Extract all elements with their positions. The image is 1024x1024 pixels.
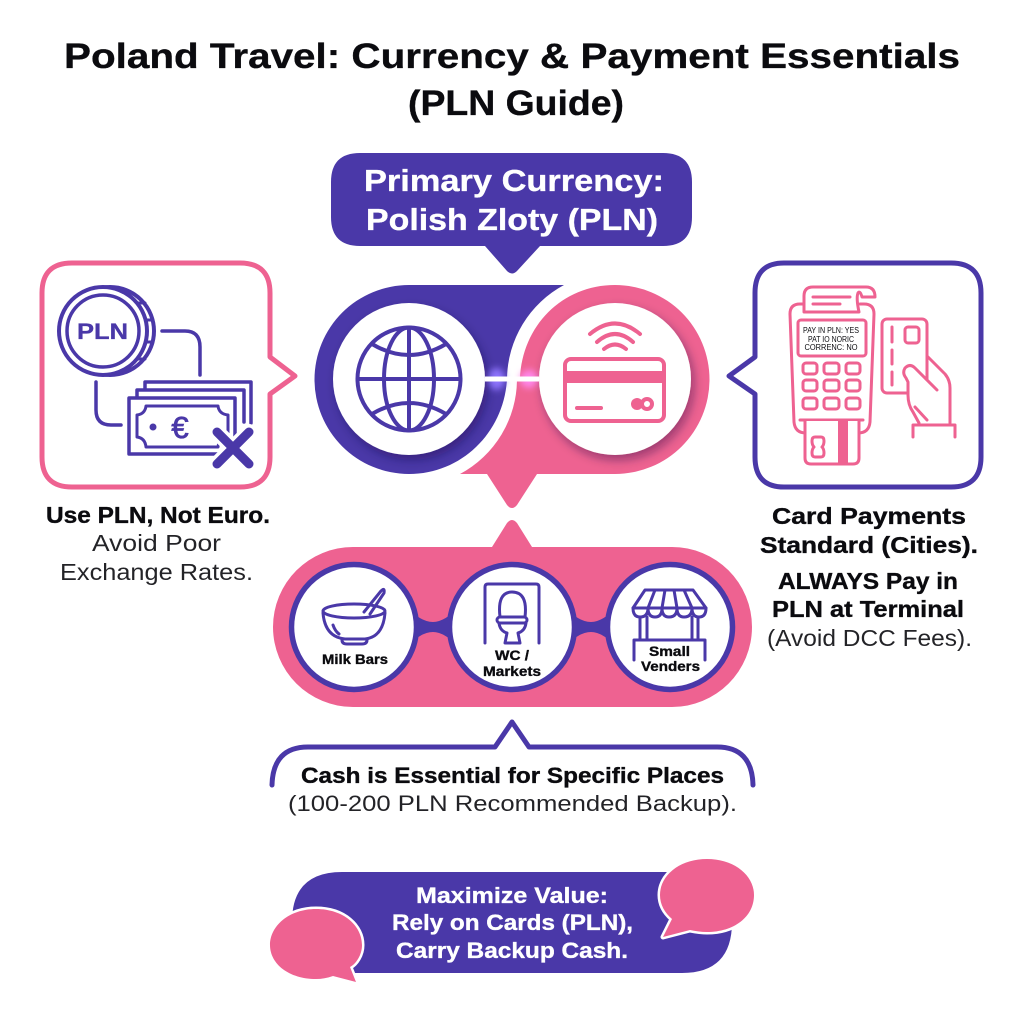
icon: euro banknotes crossed out <box>129 382 251 464</box>
circle: WC / markets <box>450 564 574 690</box>
callout: primary currency <box>331 153 692 274</box>
icon: contactless card <box>565 324 664 421</box>
icon: bowl and spoon <box>323 589 385 644</box>
icon: payment terminal <box>790 287 875 464</box>
purple pill <box>292 872 732 973</box>
banner text: Maximize Value: <box>416 883 608 908</box>
icon: PLN coin: PLN <box>77 319 128 344</box>
icon: speech bubble left <box>270 909 362 982</box>
text: cash note: Cash is Essential for Specific Places <box>301 763 724 788</box>
text: card payments: Card Payments <box>772 503 966 529</box>
title <box>64 37 960 123</box>
panel outline: purple speech box <box>729 263 981 487</box>
arrows: exchange connectors <box>96 331 200 425</box>
purple half with globe <box>314 285 564 474</box>
text: use PLN: Avoid Poor <box>92 530 221 556</box>
circle: small vendors <box>608 564 732 690</box>
icon: toilet <box>485 584 539 643</box>
text: card payments: PLN at Terminal <box>772 596 964 622</box>
circle: milk bars <box>292 564 416 690</box>
panel: use PLN not euro <box>42 263 295 487</box>
circle: small vendors: Venders <box>641 659 700 674</box>
bracket: cash note <box>272 722 753 785</box>
circle: WC / markets: WC / <box>495 647 529 663</box>
circle: milk bars: Milk Bars <box>322 652 388 667</box>
title: Poland Travel: Currency & Payment Essentials <box>64 37 960 76</box>
connector: white link <box>485 376 539 382</box>
terminal screen text: PAY IN PLN: YES <box>803 326 859 335</box>
central globe and card hub <box>314 285 710 508</box>
panel: cash places <box>273 520 752 707</box>
icon: euro banknotes crossed out: € <box>171 410 189 445</box>
text: card payments: ALWAYS Pay in <box>778 568 958 594</box>
text: cash note <box>288 763 737 816</box>
text: use PLN: Exchange Rates. <box>60 559 253 585</box>
icon: hand holding card <box>882 319 955 437</box>
text: card payments <box>760 503 978 651</box>
pink pill with pointer <box>273 520 752 707</box>
terminal screen text: PAT IO NORIC <box>808 335 854 344</box>
banner text: Carry Backup Cash. <box>396 938 628 963</box>
banner text: Rely on Cards (PLN), <box>392 910 633 935</box>
circle: WC / markets: Markets <box>483 663 541 679</box>
banner: maximize value <box>270 859 754 982</box>
title: (PLN Guide) <box>408 84 624 123</box>
text: cash note: (100-200 PLN Recommended Backup). <box>288 791 737 816</box>
terminal screen text <box>803 326 859 352</box>
banner text <box>392 883 633 963</box>
icon: market stall <box>633 590 706 660</box>
icon: speech bubble right <box>660 859 754 937</box>
icon: globe <box>358 328 460 430</box>
icon: PLN coin <box>59 287 154 375</box>
callout: primary currency: Primary Currency: <box>364 163 664 198</box>
text: card payments: (Avoid DCC Fees). <box>767 625 972 651</box>
pink half with contactless card <box>460 285 710 508</box>
callout: primary currency: Polish Zloty (PLN) <box>366 202 658 237</box>
panel outline: pink speech box <box>42 263 295 487</box>
circle: small vendors: Small <box>649 644 690 659</box>
text: use PLN <box>46 502 270 585</box>
connectors between circles <box>405 605 619 649</box>
text: use PLN: Use PLN, Not Euro. <box>46 502 270 528</box>
terminal screen text: CORRENC: NO <box>804 343 858 352</box>
panel: card terminal <box>729 263 981 487</box>
text: card payments: Standard (Cities). <box>760 532 978 558</box>
